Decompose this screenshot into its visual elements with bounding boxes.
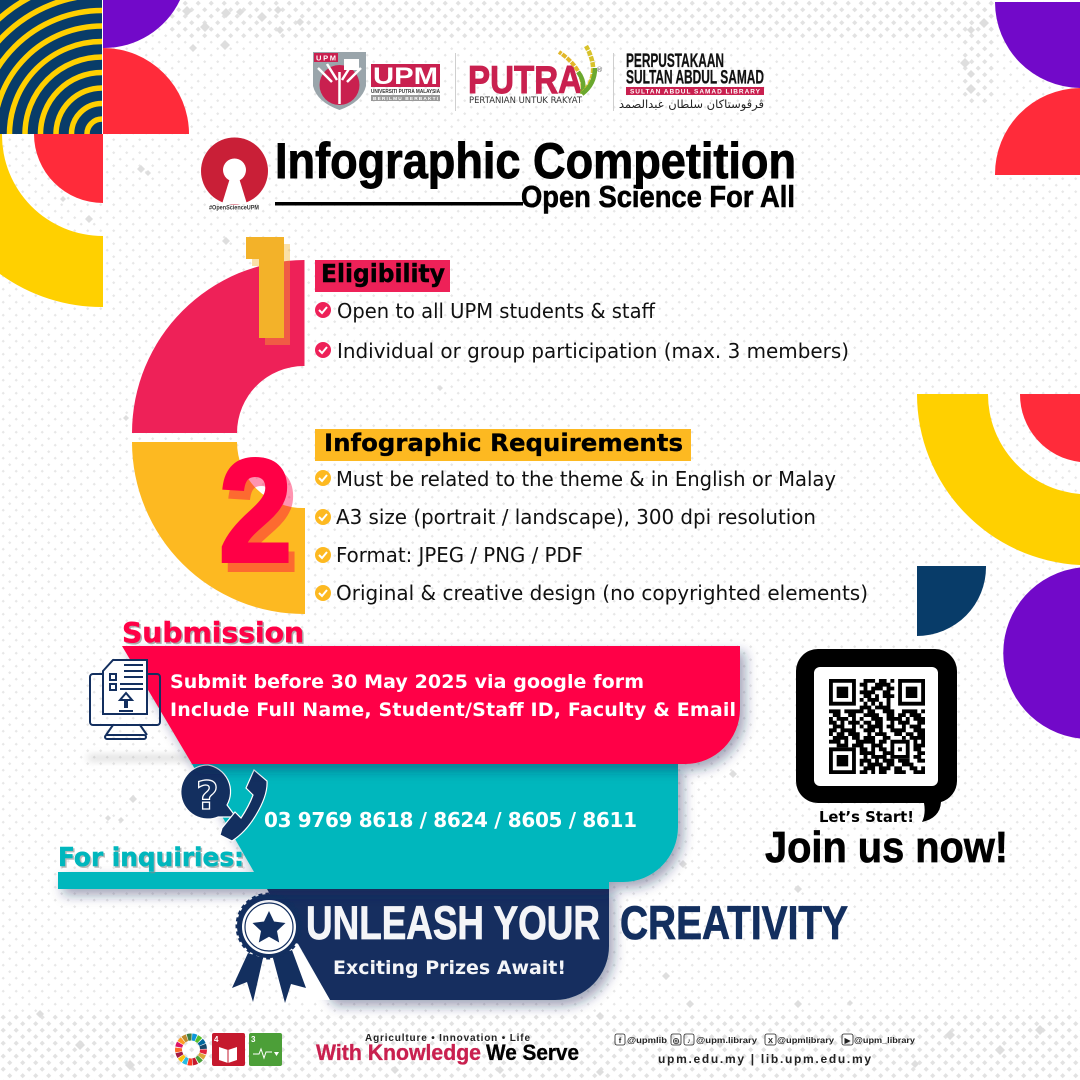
footer: SDG icons xyxy=(173,1032,282,1067)
logo: UPM: UPM xyxy=(316,54,336,62)
list item: open to all: Open to all UPM students & staff xyxy=(337,299,656,323)
panel: requirements xyxy=(315,429,868,605)
logo: UPM xyxy=(313,52,440,110)
decorative shapes: top right xyxy=(995,2,1080,175)
panel: eligibility xyxy=(315,259,849,363)
heading: submission: Submission xyxy=(124,618,306,650)
logo: library: SULTAN ABDUL SAMAD LIBRARY xyxy=(630,88,761,96)
decorative shapes: right side xyxy=(917,394,1080,738)
footer: social handles: @upmlibrary xyxy=(777,1036,835,1045)
panel: inquiries xyxy=(58,764,678,889)
footer: social handles: ◎ xyxy=(673,1036,680,1045)
footer: slogan: With Knowledge xyxy=(316,1040,481,1065)
text: unleash your: UNLEASH YOUR xyxy=(306,896,600,949)
icon: question and phone xyxy=(181,765,267,841)
footer: social handles: f xyxy=(619,1036,622,1045)
icon: open science keyhole: #OpenScienceUPM xyxy=(209,204,259,212)
logo: UPM: UNIVERSITI PUTRA MALAYSIA xyxy=(371,89,440,95)
number 2: 2 xyxy=(225,438,298,601)
logo: PUTRA: PERTANIAN UNTUK RAKYAT xyxy=(469,96,582,106)
icon: SDG 4: 4 xyxy=(214,1035,219,1044)
QR code speech bubble xyxy=(796,649,957,822)
number 1 xyxy=(246,237,290,345)
QR code xyxy=(829,679,925,774)
icon: SDG wheel xyxy=(173,1032,209,1067)
list item: individual or group: Individual or group participation (max. 3 members) xyxy=(337,339,849,363)
number 1: 1 xyxy=(249,184,301,386)
list item: theme: Must be related to the theme & in English or Malay xyxy=(336,467,836,491)
icon: open science keyhole xyxy=(201,138,268,212)
text: let's start: Let’s Start! xyxy=(819,808,914,826)
list item: original: Original & creative design (no copyrighted elements) xyxy=(336,581,868,605)
shadow under submission slant xyxy=(88,756,193,760)
heading: for inquiries: For inquiries: xyxy=(58,843,244,873)
icon: document upload monitor xyxy=(90,660,160,739)
footer: websites: upm.edu.my | lib.upm.edu.my xyxy=(658,1052,871,1066)
number 2: 2 xyxy=(219,429,292,592)
text: submit before: Submit before 30 May 2025 via google form xyxy=(170,671,644,693)
logo: PUTRA: PUTRA xyxy=(468,59,582,102)
icon: question and phone: ? xyxy=(196,774,219,819)
footer: social handles: ♪ xyxy=(687,1036,691,1045)
logo: UPM: UPM xyxy=(373,63,438,90)
footer: social handles: @upmlib xyxy=(627,1036,667,1045)
logo: PUTRA: ® xyxy=(596,66,603,74)
heading: requirements: Infographic Requirements xyxy=(324,429,683,457)
text: join us now: Join us now! xyxy=(765,823,1008,872)
text: creativity: CREATIVITY xyxy=(620,896,848,949)
footer: slogan: Agriculture • Innovation • Life xyxy=(365,1033,530,1044)
heading: for inquiries: For inquiries: xyxy=(60,844,246,874)
logo: library: ڤرڤوستاكان سلطان عبدالصمد xyxy=(619,97,764,112)
decorative shapes: top left xyxy=(0,0,189,307)
logo: UPM: BERILMU BERBAKTI xyxy=(373,96,439,102)
footer: social handles: ▶ xyxy=(844,1036,852,1045)
panel: prizes banner xyxy=(232,889,609,1003)
heading: eligibility: Eligibility xyxy=(321,259,445,288)
footer: social handles: @upm.library xyxy=(696,1036,758,1045)
title xyxy=(275,133,796,214)
footer: social handles: @upm_library xyxy=(854,1036,916,1045)
footer: slogan xyxy=(316,1033,579,1065)
footer: slogan: We Serve xyxy=(486,1040,579,1065)
text: phone numbers: 03 9769 8618 / 8624 / 8605 / 8611 xyxy=(264,808,637,832)
logo: library: PERPUSTAKAAN xyxy=(626,51,724,72)
heading: submission: Submission xyxy=(122,616,304,649)
icon: award ribbon xyxy=(232,889,330,1003)
title: Infographic Competition xyxy=(275,133,796,189)
logo: library xyxy=(619,51,764,112)
logos row xyxy=(313,46,764,112)
logo: library: SULTAN ABDUL SAMAD xyxy=(626,68,764,88)
panel: submission xyxy=(90,616,740,764)
text: exciting prizes: Exciting Prizes Await! xyxy=(333,957,566,979)
list item: format: Format: JPEG / PNG / PDF xyxy=(336,543,583,567)
icon: SDG 3: 3 xyxy=(251,1035,256,1044)
list item: size: A3 size (portrait / landscape), 300 dpi resolution xyxy=(336,505,816,529)
title: Open Science For All xyxy=(521,179,795,214)
footer: social handles xyxy=(615,1034,916,1045)
footer: social handles: X xyxy=(768,1036,773,1045)
text: include details: Include Full Name, Student/Staff ID, Faculty & Email xyxy=(170,699,736,721)
number 1: 1 xyxy=(243,177,295,379)
donut chart segments xyxy=(132,260,305,614)
